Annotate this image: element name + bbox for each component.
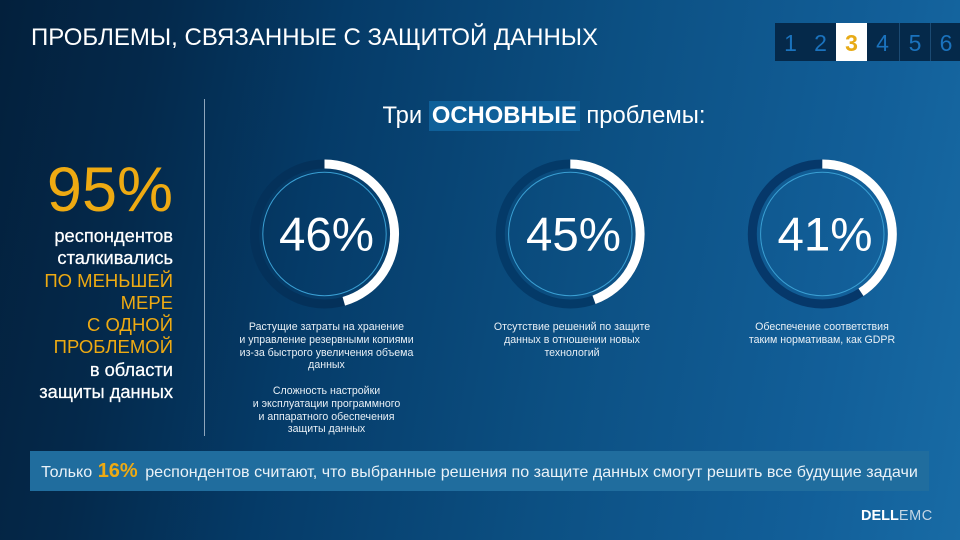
donut chart 41% xyxy=(748,160,897,308)
description 46%: Сложность настройки xyxy=(273,385,380,397)
big number 95%: 95% xyxy=(47,155,173,225)
nav numbers: 2 xyxy=(814,30,827,56)
stat description: ПРОБЛЕМОЙ xyxy=(54,336,173,357)
donut chart 45%: 45% xyxy=(526,208,621,262)
donut chart 46%: 46% xyxy=(279,208,374,262)
stat description: С ОДНОЙ xyxy=(87,314,173,335)
description 45% xyxy=(494,321,650,359)
description 41%: Обеспечение соответствия xyxy=(755,321,889,333)
description 45%: технологий xyxy=(544,347,600,359)
nav numbers: 6 xyxy=(940,30,952,56)
nav numbers: 1 xyxy=(784,30,797,56)
donut chart 41%: 41% xyxy=(777,208,873,262)
stat description: в области xyxy=(90,359,173,380)
donut chart 46% xyxy=(260,160,400,308)
subtitle: ОСНОВНЫЕ xyxy=(432,102,577,129)
description 45%: данных в отношении новых xyxy=(504,334,640,346)
stat description: сталкивались xyxy=(57,247,173,268)
bottom callout bar xyxy=(30,451,929,491)
bottom callout bar: Только 16% респондентов считают, что выбранные решения по защите данных смогут решить все будущие задачи xyxy=(41,460,918,482)
description 46%: из-за быстрого увеличения объема xyxy=(240,347,413,359)
logo: Dell EMC: DELLEMC xyxy=(861,508,933,524)
stat description: ПО МЕНЬШЕЙ xyxy=(44,270,173,291)
slide navigator xyxy=(775,23,960,61)
description 46%: Растущие затраты на хранение xyxy=(249,321,404,333)
description 46%: защиты данных xyxy=(288,423,365,435)
donut chart 45% xyxy=(496,160,645,308)
title: ПРОБЛЕМЫ, СВЯЗАННЫЕ С ЗАЩИТОЙ ДАННЫХ xyxy=(31,24,598,51)
description 46% xyxy=(239,321,414,435)
subtitle: Три проблемы: xyxy=(382,102,706,129)
description 46%: и эксплуатации программного xyxy=(253,398,400,410)
nav numbers: 5 xyxy=(909,30,921,56)
nav numbers: 3 xyxy=(845,30,858,56)
stat description xyxy=(39,225,173,402)
stat description: защиты данных xyxy=(39,381,173,402)
vertical divider xyxy=(204,99,205,436)
description 45%: Отсутствие решений по защите xyxy=(494,321,650,333)
description 46%: и аппаратного обеспечения xyxy=(259,411,394,423)
stat description: респондентов xyxy=(54,225,173,246)
nav numbers: 4 xyxy=(876,30,889,56)
description 41%: таким нормативам, как GDPR xyxy=(749,334,895,346)
description 46%: данных xyxy=(308,359,345,371)
description 41% xyxy=(749,321,895,346)
stat description: МЕРЕ xyxy=(121,292,173,313)
left stat panel xyxy=(39,155,173,402)
description 46%: и управление резервными копиями xyxy=(239,334,414,346)
nav numbers xyxy=(784,23,952,61)
